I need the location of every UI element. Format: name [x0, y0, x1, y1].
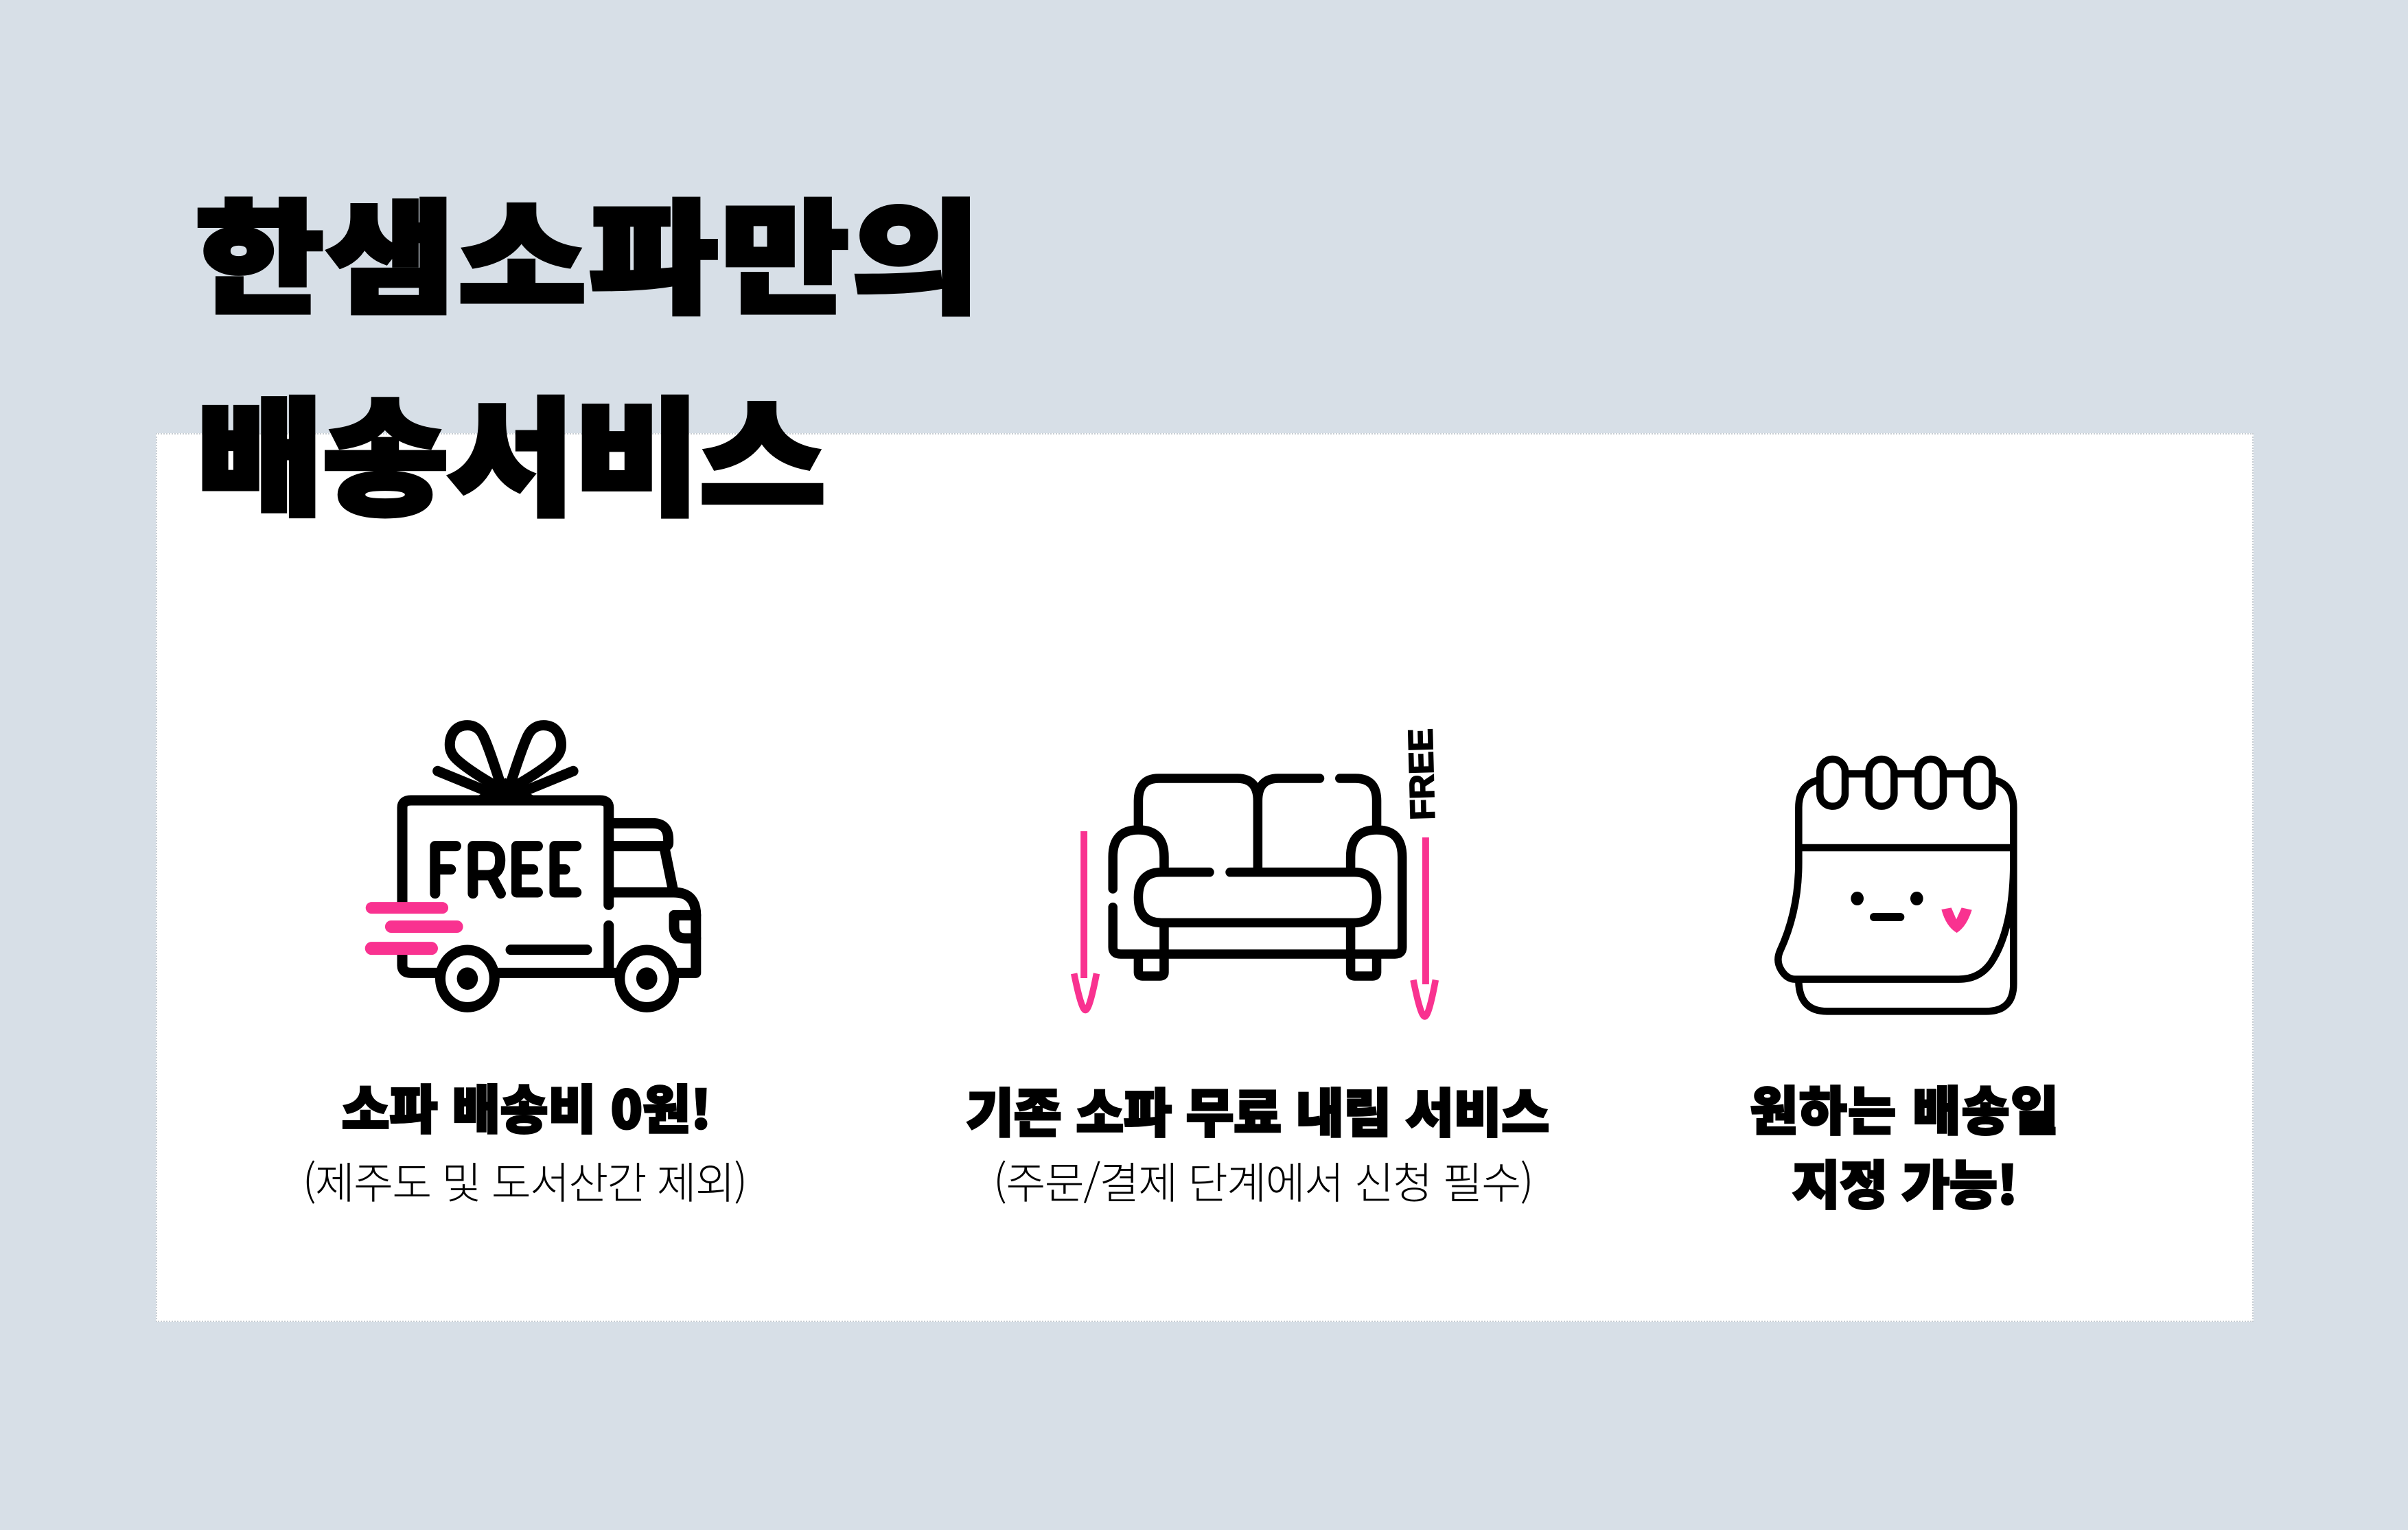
- truck FREE lettering drawn as icon strokes: [435, 846, 577, 894]
- feature 1 note: (제주도 및 도서산간 제외): [303, 1149, 746, 1212]
- feature 1 heading: 소파 배송비 0원!: [342, 1068, 711, 1144]
- pink arrow right: [1413, 837, 1435, 1017]
- icon: free delivery truck with gift bow: [365, 720, 702, 1012]
- feature 2 note: (주문/결제 단계에서 신청 필수): [993, 1149, 1533, 1212]
- title: [196, 161, 984, 541]
- truck bow: [438, 726, 573, 797]
- calendar face: [1851, 892, 1923, 917]
- truck cargo box: [402, 800, 696, 973]
- feature 3 heading line 1: 원하는 배송일: [1750, 1069, 2060, 1145]
- icon: calendar with face: [1774, 755, 2017, 1015]
- feature 2 heading: 기존 소파 무료 내림 서비스: [966, 1071, 1549, 1147]
- sofa FREE label rotated: FREE: [1401, 728, 1442, 820]
- pink speed lines: [371, 908, 457, 949]
- feature 3 heading line 2: 지정 가능!: [1792, 1144, 2017, 1219]
- calendar body: [1778, 780, 2013, 1011]
- truck wheels: [440, 950, 674, 1007]
- pink mark: [1941, 907, 1972, 933]
- title line 1: 한샘소파만의: [196, 161, 984, 338]
- icon: sofa with pink down arrows: [1071, 774, 1439, 1020]
- truck cab: [612, 823, 696, 938]
- panel: white service card: [156, 433, 2254, 1322]
- sofa outline: [1113, 778, 1402, 976]
- pink arrow left: [1074, 831, 1097, 1010]
- title line 2: 배송서비스: [197, 358, 825, 541]
- calendar rings: [1820, 759, 1992, 807]
